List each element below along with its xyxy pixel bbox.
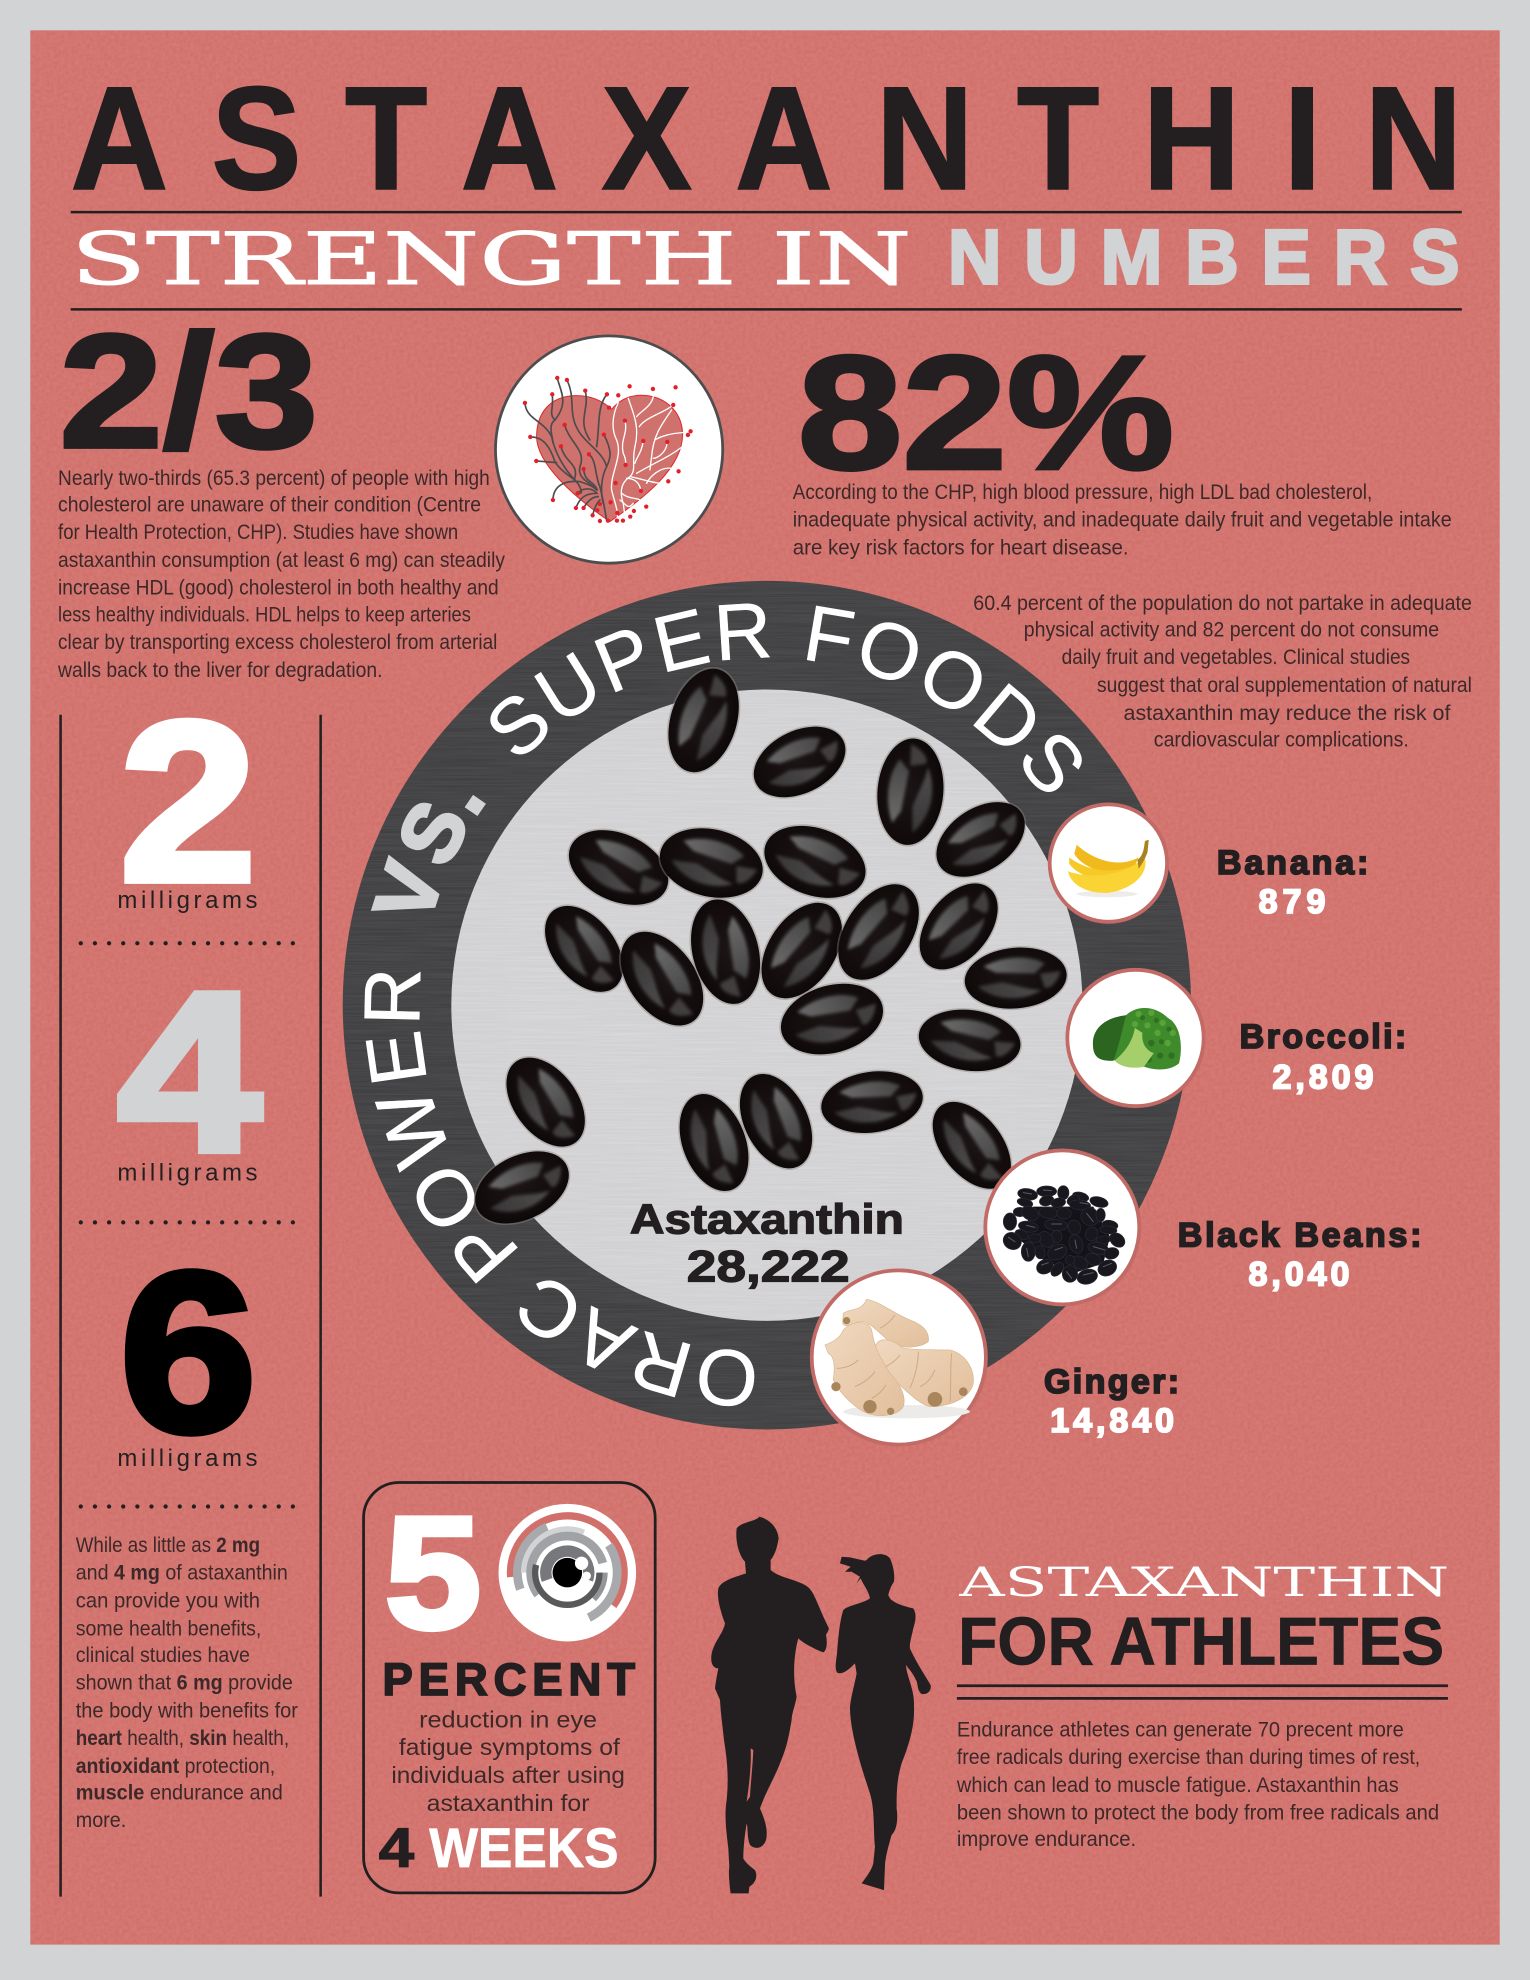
eye fatigue description: individuals after using: [391, 1762, 625, 1788]
top rule: [71, 211, 1462, 213]
softgel capsules: [462, 657, 1071, 1240]
number 5: 5: [385, 1484, 481, 1662]
text block: risk factors: [793, 481, 1452, 559]
text block: athletes: [956, 1718, 1439, 1851]
text block: dosage benefits: muscle endurance and: [76, 1781, 283, 1804]
text block: athletes: free radicals during exercise than during times of rest,: [957, 1746, 1420, 1769]
icon: runners silhouette: [711, 1517, 931, 1893]
4 weeks: 4: [379, 1817, 414, 1879]
bottom rule: [71, 308, 1462, 310]
text block: cholesterol: clear by transporting excess cholesterol from arterial: [58, 631, 497, 654]
text block: cholesterol: for Health Protection, CHP). Studies have shown: [58, 521, 458, 544]
text block: risk factors: inadequate physical activity, and inadequate daily fruit and vegetable intake: [793, 509, 1452, 532]
subtitle: strength in: STRENGTH IN: [71, 217, 911, 301]
panel: eye fatigue: [364, 1482, 655, 1893]
dose: 2 milligrams: 2: [120, 675, 256, 929]
icon: broccoli: [1067, 970, 1204, 1106]
subtitle: numbers: NUMBERS: [948, 214, 1459, 300]
icon: ginger: [812, 1270, 986, 1445]
label: banana: 879: [1259, 883, 1325, 921]
text block: cholesterol: [57, 467, 505, 682]
man runner: [711, 1517, 829, 1893]
label: banana: Banana:: [1217, 844, 1368, 882]
curved heading: [364, 604, 1082, 1406]
eye fatigue description: astaxanthin for: [427, 1790, 590, 1816]
label: ginger: [1044, 1363, 1179, 1440]
text block: population: 60.4 percent of the population do not partake in adequate: [973, 592, 1472, 615]
ORAC dial: [342, 580, 1191, 1430]
panel outline: [364, 1482, 655, 1893]
gap between man's legs: [747, 1748, 753, 1802]
heading: astaxanthin for athletes: ASTAXANTHIN: [958, 1558, 1449, 1606]
text block: athletes: Endurance athletes can generate 70 precent more: [957, 1718, 1404, 1741]
label: banana: [1217, 844, 1368, 921]
heading rule bottom: [957, 1697, 1448, 1700]
label: ginger: Ginger:: [1044, 1363, 1179, 1401]
curved heading: SUPER FOODS: [490, 604, 1082, 792]
text block: dosage benefits: antioxidant protection,: [76, 1755, 275, 1778]
text block: risk factors: According to the CHP, high blood pressure, high LDL bad cholesterol,: [793, 481, 1372, 504]
text block: cholesterol: walls back to the liver for degradation.: [57, 659, 383, 682]
dose: 6 milligrams: 6: [120, 1226, 256, 1480]
text block: cholesterol: astaxanthin consumption (at least 6 mg) can steadily: [58, 549, 505, 572]
left column rule: [60, 715, 62, 1897]
icon: black beans: [985, 1150, 1139, 1304]
label: broccoli: 2,809: [1272, 1058, 1373, 1096]
stat: 2/3: 2/3: [59, 302, 318, 482]
label: broccoli: Broccoli:: [1240, 1018, 1406, 1056]
label: ginger: 14,840: [1050, 1402, 1174, 1440]
text block: dosage benefits: more.: [76, 1809, 126, 1832]
text block: cholesterol: cholesterol are unaware of their condition (Centre: [58, 493, 481, 516]
curved heading: VS.: [370, 794, 486, 911]
text block: dosage benefits: While as little as 2 mg: [76, 1534, 260, 1557]
stat: 82%: 82%: [798, 323, 1174, 503]
astaxanthin value: Astaxanthin: [630, 1196, 904, 1243]
label: black beans: 8,040: [1248, 1255, 1349, 1293]
right column rule: [320, 715, 322, 1897]
heading: astaxanthin for athletes: FOR ATHLETES: [958, 1603, 1444, 1679]
label: black beans: [1178, 1216, 1421, 1293]
text block: athletes: which can lead to muscle fatigue. Astaxanthin has: [956, 1774, 1399, 1797]
text block: population: suggest that oral supplementation of natural: [1097, 674, 1472, 697]
dose: 6 milligrams: milligrams: [117, 1445, 258, 1472]
icon: banana: [1050, 804, 1167, 922]
text block: population: [973, 592, 1472, 751]
text block: athletes: improve endurance.: [957, 1828, 1136, 1851]
title: ASTAXANTHIN: [71, 57, 1462, 220]
text block: cholesterol: increase HDL (good) cholesterol in both healthy and: [58, 577, 499, 600]
text block: risk factors: are key risk factors for heart disease.: [793, 536, 1129, 559]
text block: athletes: been shown to protect the body from free radicals and: [957, 1802, 1439, 1825]
text block: dosage benefits: shown that 6 mg provide: [76, 1672, 293, 1695]
heading rule top: [957, 1685, 1448, 1687]
text block: population: astaxanthin may reduce the risk of: [1124, 702, 1451, 725]
text block: population: physical activity and 82 percent do not consume: [1024, 618, 1439, 641]
text block: population: daily fruit and vegetables. Clinical studies: [1062, 646, 1410, 669]
text block: dosage benefits: can provide you with: [76, 1589, 260, 1612]
dose: 4 milligrams: milligrams: [117, 1160, 258, 1187]
text block: dosage benefits: clinical studies have: [76, 1644, 250, 1667]
icon: eye as zero: [498, 1504, 636, 1642]
text block: dosage benefits: and 4 mg of astaxanthin: [76, 1562, 288, 1585]
eye fatigue description: reduction in eye: [419, 1706, 597, 1732]
heading: astaxanthin for athletes: [958, 1558, 1449, 1679]
dose: 4 milligrams: 4: [117, 945, 261, 1199]
icon: heart with veins: [495, 336, 723, 563]
text block: population: cardiovascular complications.: [1154, 728, 1409, 751]
text block: cholesterol: less healthy individuals. HDL helps to keep arteries: [58, 603, 471, 626]
dial centre: [451, 689, 1083, 1321]
woman runner: [836, 1554, 931, 1890]
subtitle: [71, 214, 1459, 301]
astaxanthin value: 28,222: [687, 1243, 850, 1292]
dose: 2 milligrams: milligrams: [117, 887, 258, 914]
text block: dosage benefits: heart health, skin health,: [76, 1727, 289, 1750]
astaxanthin value: [630, 1196, 904, 1292]
curved heading: ORAC POWER: [364, 972, 754, 1406]
label: black beans: Black Beans:: [1178, 1216, 1421, 1254]
text block: cholesterol: Nearly two-thirds (65.3 percent) of people with high: [58, 467, 490, 490]
4 weeks: WEEKS: [429, 1817, 619, 1879]
label: broccoli: [1240, 1018, 1406, 1096]
text block: dosage benefits: some health benefits,: [76, 1617, 261, 1640]
percent label: PERCENT: [382, 1654, 635, 1705]
text block: dosage benefits: the body with benefits for: [76, 1699, 298, 1722]
dial ring: [342, 581, 1192, 1429]
text block: dosage benefits: [76, 1534, 298, 1832]
eye fatigue description: [391, 1706, 625, 1816]
eye fatigue description: fatigue symptoms of: [399, 1734, 621, 1760]
